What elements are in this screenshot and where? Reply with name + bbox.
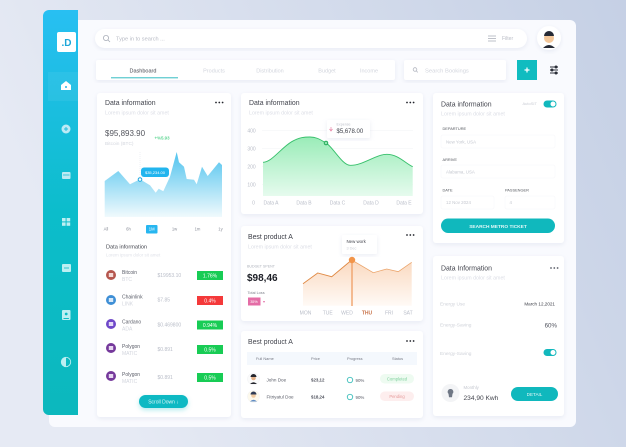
icon: card bbox=[62, 172, 70, 179]
sidebar bbox=[43, 10, 78, 415]
area chart: green: 0 bbox=[252, 200, 255, 206]
row: fitriyatul doe: Fitriyatul Doe bbox=[266, 395, 294, 400]
panel: best product chart: BUDGET SPENT bbox=[247, 264, 276, 268]
navigation tabs bbox=[96, 60, 395, 80]
row: energy use: March 12,2021 bbox=[524, 302, 555, 306]
field: date: 12 Nov 2024 bbox=[446, 200, 471, 205]
row: polygon: 0.5% bbox=[204, 347, 216, 353]
row: polygon second bbox=[106, 371, 223, 385]
row: polygon second: 0.5% bbox=[204, 375, 216, 381]
field: arrive: ARRIVE bbox=[442, 157, 457, 162]
panel: metro ticket: AutoSIT bbox=[522, 101, 538, 106]
panel: best product chart: $98,46 bbox=[247, 273, 278, 284]
panel: market card: Data information bbox=[105, 100, 156, 107]
panel: best product chart bbox=[241, 226, 423, 321]
search ticket button: SEARCH METRO TICKET bbox=[469, 224, 527, 230]
top search bar: Type in to search ... bbox=[116, 36, 165, 42]
navigation tabs: Dashboard bbox=[130, 68, 156, 74]
area chart: green: Data E bbox=[396, 200, 412, 206]
tooltip: expense: $5,678.00 bbox=[336, 129, 364, 135]
monthly usage: 234,90 Kwh bbox=[464, 395, 499, 402]
day labels: FRI bbox=[385, 310, 393, 316]
main dashboard panel bbox=[49, 20, 576, 427]
toggle bbox=[544, 100, 556, 108]
row: chainlink: 0.4% bbox=[204, 298, 216, 304]
area chart: bitcoin bbox=[105, 152, 222, 217]
panel: best product chart: Total Loss bbox=[248, 291, 265, 295]
panel: energy bbox=[433, 256, 564, 416]
row: bitcoin: 1.76% bbox=[203, 273, 218, 279]
icon: filter bbox=[488, 36, 496, 41]
day labels bbox=[300, 310, 413, 316]
navigation tabs: Budget bbox=[318, 68, 336, 74]
panel: line chart card: Data information bbox=[249, 100, 300, 107]
panel: line chart card: Lorem ipsum dolor sit amet bbox=[249, 110, 313, 116]
loss badge: ▾ bbox=[263, 299, 265, 304]
navigation tabs: Income bbox=[360, 68, 378, 74]
panel: energy: Data Information bbox=[441, 266, 492, 272]
area chart: green bbox=[247, 128, 413, 206]
loss badge bbox=[248, 298, 265, 306]
row: fitriyatul doe: $18,24 bbox=[311, 395, 325, 400]
bitcoin price: $95,893.90 bbox=[105, 129, 146, 138]
range selector: All bbox=[104, 226, 108, 232]
field: date bbox=[441, 188, 494, 209]
row: john doe: 90% bbox=[356, 378, 364, 383]
row: polygon second: Polygon bbox=[122, 372, 140, 378]
tooltip: $35,234.00 bbox=[145, 170, 166, 175]
menu dots bbox=[406, 102, 414, 103]
panel: market card: +%5.93 bbox=[154, 136, 170, 140]
panel: market card: Data information bbox=[106, 244, 147, 250]
panel: energy: Lorem ipsum dolor sit amet bbox=[441, 276, 505, 282]
logo: .D bbox=[62, 38, 72, 49]
row: chainlink bbox=[106, 294, 223, 308]
area chart: green: Data B bbox=[296, 200, 312, 206]
tooltip: expense: Expense bbox=[336, 122, 350, 126]
tooltip: new work: 3 Dec bbox=[346, 246, 357, 250]
panel: metro ticket: Lorem ipsum dolor sit amet bbox=[441, 112, 505, 118]
search ticket button bbox=[441, 218, 555, 233]
panel: product table bbox=[241, 331, 423, 418]
day labels: THU bbox=[362, 310, 373, 316]
range selector: 6h bbox=[126, 226, 131, 232]
row: john doe: Completed bbox=[387, 376, 408, 382]
row: energy use: Energy Use bbox=[440, 302, 465, 308]
row: chainlink: $7.85 bbox=[158, 298, 170, 304]
panel: market card bbox=[97, 93, 231, 417]
row: polygon: $0.891 bbox=[158, 347, 173, 353]
field: passenger bbox=[505, 188, 555, 209]
row: polygon second: MATIC bbox=[122, 379, 138, 385]
range selector: 1y bbox=[218, 226, 224, 232]
range selector: 1m bbox=[195, 226, 201, 232]
row: fitriyatul doe: 90% bbox=[356, 395, 364, 400]
row: polygon second: $0.891 bbox=[158, 375, 173, 381]
panel: market card: Lorem ipsum dolor sit amet bbox=[105, 110, 169, 116]
row: cardano: 0.94% bbox=[203, 323, 218, 329]
tooltip: new work bbox=[342, 235, 377, 254]
row: cardano: Cardano bbox=[122, 319, 141, 325]
day labels: TUE bbox=[323, 310, 333, 316]
icon: search bbox=[103, 35, 110, 42]
table header: Full Name bbox=[256, 356, 274, 361]
row: chainlink: LINK bbox=[122, 302, 134, 308]
row: john doe: John Doe bbox=[266, 377, 287, 382]
icon: circle plus bbox=[62, 124, 70, 134]
icon: sliders bbox=[550, 66, 558, 74]
top search bar bbox=[95, 29, 527, 48]
tooltip: new work: New work bbox=[346, 239, 367, 244]
panel: market card: Bitcoin (BTC) bbox=[105, 141, 134, 147]
panel: metro ticket: Data information bbox=[441, 102, 492, 108]
active menu highlight bbox=[48, 72, 78, 101]
row: fitriyatul doe bbox=[248, 390, 414, 402]
row: bitcoin bbox=[106, 270, 223, 283]
panel: best product chart: Best product A bbox=[248, 234, 293, 241]
panel: product table: Best product A bbox=[248, 339, 293, 346]
row: polygon: MATIC bbox=[122, 351, 138, 357]
row: john doe bbox=[248, 373, 414, 385]
row: energy saving toggle: Energy-Saving bbox=[440, 351, 472, 357]
scroll button bbox=[139, 395, 188, 408]
day labels: WED bbox=[341, 310, 353, 316]
area chart: green: 300 bbox=[247, 146, 256, 152]
row: energy saving percent bbox=[440, 322, 557, 330]
add button bbox=[517, 60, 537, 80]
menu dots bbox=[550, 267, 558, 269]
row: cardano bbox=[106, 319, 223, 332]
row: energy use bbox=[440, 302, 555, 308]
icon: light bulb bbox=[442, 384, 460, 402]
field: arrive: Alabama, USA bbox=[446, 170, 475, 174]
icon: profile bbox=[62, 310, 70, 320]
row: chainlink: Chainlink bbox=[122, 294, 143, 300]
tooltip: expense bbox=[327, 120, 370, 138]
row: energy saving toggle bbox=[440, 349, 556, 357]
row: bitcoin: BTC bbox=[122, 277, 132, 283]
row: energy saving percent: 60% bbox=[545, 322, 557, 330]
row: bitcoin: Bitcoin bbox=[122, 270, 137, 276]
table header bbox=[247, 352, 417, 365]
area chart: green: Data D bbox=[363, 200, 379, 206]
field: departure: New York, USA bbox=[446, 140, 476, 144]
table header: Progress bbox=[347, 356, 363, 361]
monthly usage bbox=[464, 385, 499, 402]
range selector: 1w bbox=[172, 226, 178, 232]
navigation tabs: Distribution bbox=[256, 68, 284, 74]
row: cardano: $0.469800 bbox=[158, 322, 181, 328]
avatar bbox=[537, 26, 561, 50]
range selector bbox=[104, 225, 224, 234]
area chart: green: 400 bbox=[247, 128, 256, 134]
field: arrive bbox=[441, 157, 555, 178]
table header: Price bbox=[311, 356, 320, 361]
panel: market card: Lorem ipsum dolor sit amet bbox=[106, 252, 161, 258]
field: date: DATE bbox=[442, 188, 453, 192]
monthly usage: Monthly bbox=[464, 385, 480, 390]
range selector: 1M bbox=[149, 226, 155, 232]
menu dots bbox=[406, 234, 414, 236]
row: polygon bbox=[106, 343, 223, 357]
area chart: green: Data C bbox=[330, 200, 346, 206]
row: john doe: $23,12 bbox=[311, 377, 325, 382]
panel: line chart card bbox=[241, 93, 423, 214]
day labels: SAT bbox=[403, 310, 413, 316]
icon: home bbox=[61, 81, 71, 90]
area chart: orange bbox=[303, 257, 412, 306]
row: bitcoin: $19953.10 bbox=[158, 273, 181, 279]
field: passenger: 4 bbox=[510, 200, 512, 205]
search bookings bbox=[404, 60, 506, 80]
area chart: green: Data A bbox=[263, 200, 279, 206]
detail button bbox=[511, 387, 558, 401]
panel: best product chart: Lorem ipsum dolor sit amet bbox=[248, 244, 312, 250]
day labels: MON bbox=[300, 310, 312, 316]
top search bar: Filter bbox=[502, 36, 513, 42]
menu dots bbox=[406, 340, 414, 342]
table header: Status bbox=[392, 356, 403, 361]
area chart: green: 200 bbox=[247, 164, 256, 170]
detail button: DETAIL bbox=[527, 392, 543, 397]
row: cardano: ADA bbox=[122, 326, 133, 332]
field: departure bbox=[441, 126, 555, 148]
field: passenger: PASSENGER bbox=[505, 188, 529, 192]
field: departure: DEPARTURE bbox=[442, 126, 467, 131]
row: energy saving percent: Energy-Saving bbox=[440, 322, 472, 328]
row: polygon: Polygon bbox=[122, 344, 140, 350]
scroll button: Scroll Down ↓ bbox=[148, 400, 179, 406]
panel: metro ticket bbox=[433, 93, 564, 243]
search bookings: Search Bookings bbox=[425, 68, 469, 74]
menu dots bbox=[215, 102, 224, 103]
icon: calendar bbox=[62, 264, 71, 272]
logo bbox=[57, 32, 76, 52]
row: fitriyatul doe: Pending bbox=[389, 394, 405, 399]
loss badge: 35% bbox=[250, 300, 258, 304]
area chart: green: 100 bbox=[247, 182, 256, 188]
icon: contrast bbox=[61, 357, 71, 367]
navigation tabs: Products bbox=[203, 68, 225, 74]
icon: grid bbox=[62, 218, 70, 226]
